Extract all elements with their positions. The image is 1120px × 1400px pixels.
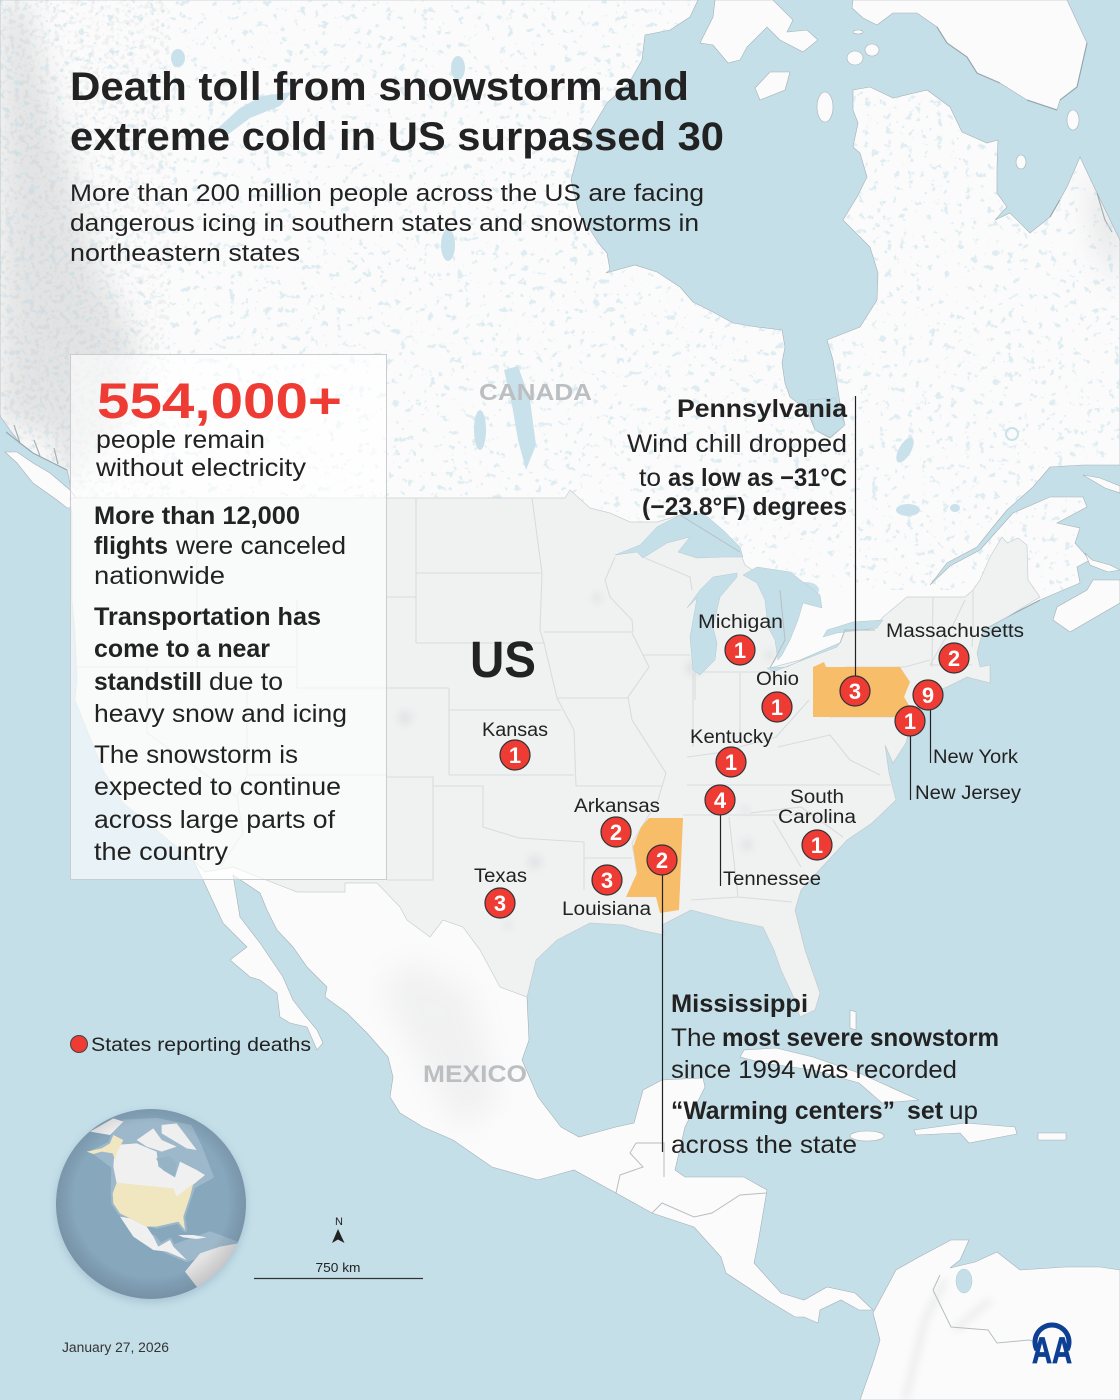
state marker: Kentucky: [690, 727, 774, 777]
state marker: Louisiana: [562, 865, 651, 920]
state marker: Kansas: Kansas: [482, 720, 548, 741]
contiguous United States: [113, 1183, 193, 1230]
callout: Mississippi: up: [949, 1097, 978, 1125]
callout: Mississippi: most severe snowstorm: [722, 1024, 999, 1052]
state marker: Mississippi: 2: [656, 848, 668, 873]
callout: Mississippi: [662, 875, 999, 1159]
international boundaries: [616, 515, 1045, 1345]
subtitle: [70, 180, 704, 267]
callout: Mississippi: since 1994 was recorded: [671, 1056, 957, 1084]
state marker: Pennsylvania: 3: [849, 679, 861, 704]
state marker: Arkansas: Arkansas: [574, 796, 660, 817]
leader line: New York: [930, 708, 932, 763]
text block: transportation: heavy snow and icing: [94, 700, 347, 728]
Mexico and Central America: [120, 1217, 187, 1260]
highlighted state: Mississippi: [626, 818, 683, 913]
state marker: Michigan: [698, 612, 783, 665]
locator globe: [55, 1109, 247, 1303]
text block: forecast: [94, 741, 341, 866]
callout: Pennsylvania: Wind chill dropped: [627, 430, 847, 458]
rugged coastlines: [6, 27, 1112, 630]
callout: Mississippi: set: [907, 1097, 944, 1125]
text block: forecast: across large parts of: [94, 806, 335, 834]
stat: people without electricity: [95, 373, 342, 482]
state marker: Mississippi: [647, 845, 677, 875]
title: Death toll from snowstorm and: [70, 65, 689, 109]
state marker: Pennsylvania: [840, 676, 870, 706]
subtitle: northeastern states: [70, 240, 300, 267]
state marker: Michigan: 1: [734, 638, 746, 663]
state marker: Massachusetts: Massachusetts: [886, 621, 1024, 642]
panel: key facts: [70, 354, 386, 880]
state marker: Michigan: Michigan: [698, 612, 783, 633]
state marker: South Carolina: South: [790, 787, 844, 808]
date: January 27, 2026: [62, 1340, 169, 1355]
state marker: New Jersey: New Jersey: [915, 783, 1022, 804]
callout: Mississippi: The: [671, 1024, 716, 1052]
stat: people without electricity: people remain: [96, 426, 265, 454]
state marker: Tennessee: 4: [714, 788, 727, 813]
Canada: [113, 1143, 205, 1197]
highlighted state: Pennsylvania: [813, 662, 910, 717]
north arrow: [332, 1216, 344, 1243]
state marker: New York: 9: [922, 683, 934, 708]
text block: flights: nationwide: [94, 562, 225, 590]
state marker: New York: New York: [933, 747, 1019, 768]
metro area shading: [398, 593, 935, 929]
state marker: Louisiana: 3: [601, 868, 613, 893]
logo: AA: AA: [1032, 1330, 1072, 1371]
stat: people without electricity: 554,000+: [97, 373, 342, 429]
label: Mexico: MEXICO: [423, 1061, 527, 1088]
text block: flights: More than 12,000: [94, 502, 300, 530]
label: Canada: CANADA: [479, 379, 592, 405]
subtitle: dangerous icing in southern states and snowstorms in: [70, 210, 699, 237]
callout: Mississippi: across the state: [671, 1131, 857, 1159]
state marker: New York: [913, 680, 1019, 768]
leader line: Tennessee: [720, 815, 722, 886]
callout: Pennsylvania: to: [639, 464, 661, 492]
text block: forecast: The snowstorm is: [94, 741, 298, 769]
state marker: South Carolina: Carolina: [778, 807, 856, 828]
legend: states reporting deaths: States reporting deaths: [91, 1035, 311, 1056]
callout: Pennsylvania: (−23.8°F) degrees: [642, 493, 847, 521]
state marker: South Carolina: [778, 787, 856, 860]
scattered lakes: [0, 0, 1120, 590]
text block: transportation: standstill: [94, 668, 202, 696]
leader line: New Jersey: [910, 736, 912, 800]
state marker: Texas: [474, 866, 527, 918]
callout: Mississippi: Mississippi: [671, 990, 808, 1018]
state marker: Texas: 3: [494, 891, 506, 916]
state marker: South Carolina: 1: [811, 833, 823, 858]
state marker: Kansas: 1: [509, 743, 521, 768]
callout: Mississippi: “Warming centers”: [671, 1097, 895, 1125]
state marker: Massachusetts: 2: [948, 646, 960, 671]
Great Lakes: [615, 398, 972, 1293]
subtitle: More than 200 million people across the US are facing: [70, 180, 704, 207]
text block: transportation: come to a near: [94, 635, 270, 663]
text block: flights: [94, 502, 346, 590]
north arrow: N: [335, 1216, 343, 1228]
text block: forecast: expected to continue: [94, 773, 341, 801]
state marker: Louisiana: Louisiana: [562, 899, 651, 920]
text block: forecast: the country: [94, 838, 229, 866]
United States land area: [70, 490, 1040, 1017]
state marker: Massachusetts: [886, 621, 1024, 673]
stat: people without electricity: without electricity: [95, 454, 307, 482]
state marker: Kentucky: 1: [725, 750, 737, 775]
state borders: [75, 498, 973, 902]
text block: flights: flights: [94, 532, 168, 560]
text block: transportation: [94, 603, 347, 728]
state marker: Kentucky: Kentucky: [690, 727, 774, 748]
state marker: Kansas: [482, 720, 548, 770]
state marker: New Jersey: 1: [904, 709, 916, 734]
state marker: New Jersey: [895, 706, 1022, 804]
state marker: Ohio: 1: [771, 695, 783, 720]
text block: transportation: due to: [209, 668, 283, 696]
continental shelf: [93, 1120, 237, 1260]
title: extreme cold in US surpassed 30: [70, 115, 724, 159]
state marker: Arkansas: 2: [610, 820, 622, 845]
Alaska: [87, 1135, 123, 1160]
state marker: Texas: Texas: [474, 866, 527, 887]
major Canadian lakes: [171, 49, 1018, 598]
text block: transportation: Transportation has: [94, 603, 321, 631]
logo: AA: [1032, 1325, 1072, 1371]
label: US: US: [470, 631, 536, 688]
state marker: Ohio: [756, 669, 799, 722]
state marker: Ohio: Ohio: [756, 669, 799, 690]
title: [70, 65, 724, 159]
South America: [185, 1243, 243, 1287]
relief in northern South America: [905, 1280, 990, 1400]
text block: flights: were canceled: [175, 532, 346, 560]
state marker: Tennessee: [705, 785, 821, 890]
state marker: Arkansas: [574, 796, 660, 847]
callout: Pennsylvania: as low as −31°C: [668, 464, 847, 492]
scale bar: 750 km: [316, 1260, 360, 1275]
Arctic land: [90, 1118, 197, 1152]
callout: Pennsylvania: Pennsylvania: [677, 395, 848, 423]
state marker: Tennessee: Tennessee: [723, 869, 821, 890]
callout: Pennsylvania: [627, 395, 856, 680]
